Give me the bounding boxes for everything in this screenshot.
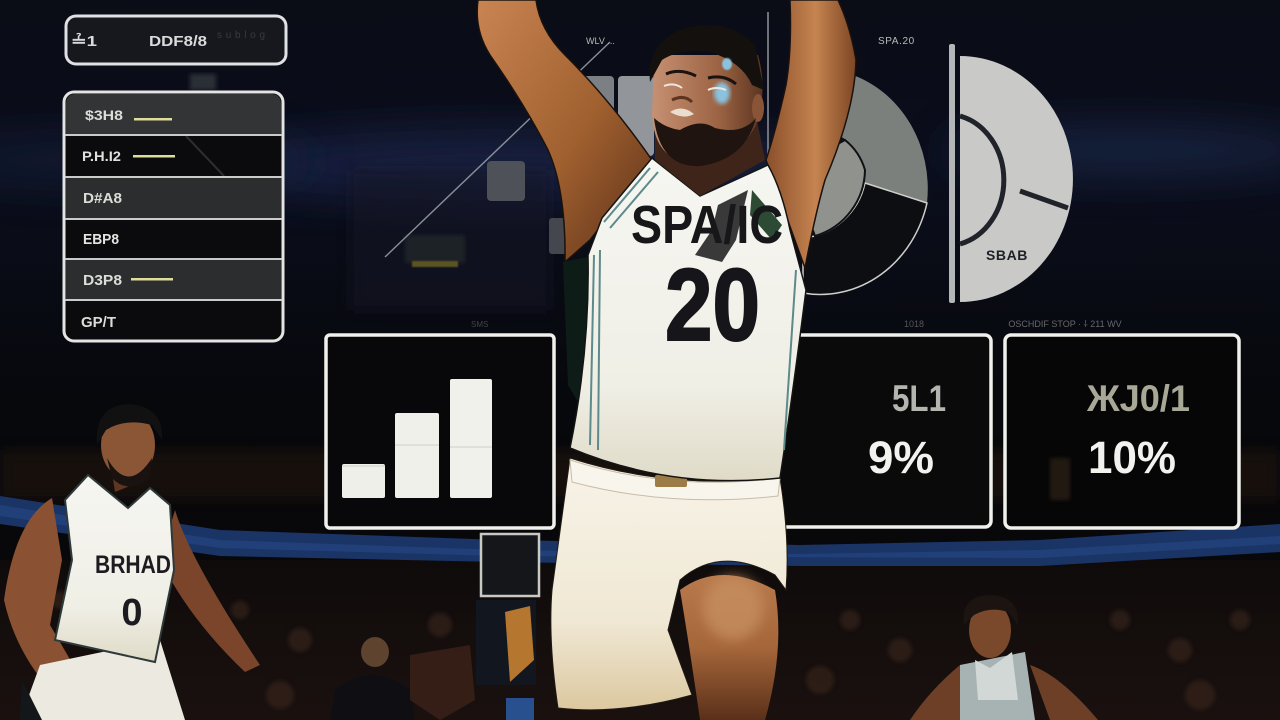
left arm <box>477 0 652 262</box>
bar 1 <box>342 464 385 498</box>
jersey <box>570 158 806 481</box>
header title: DDF8/8 <box>149 33 207 50</box>
right arm <box>766 0 856 268</box>
half donut label: SBAB <box>986 247 1028 263</box>
row 6: GP/T <box>81 314 116 331</box>
left player number: 0 <box>121 592 143 634</box>
jersey wordmark: SPA/IC <box>631 195 783 255</box>
panel: header bar <box>66 16 286 64</box>
panel: bar chart <box>326 335 554 528</box>
lower legs <box>680 575 778 720</box>
hair <box>650 25 764 90</box>
bar 3 <box>450 379 492 498</box>
face highlights <box>714 82 730 104</box>
right player <box>910 595 1098 720</box>
neck <box>655 110 765 196</box>
row 1: $3H8 <box>85 107 123 123</box>
row 5: D3P8 <box>83 272 122 289</box>
faded glyph <box>1050 458 1070 500</box>
panel: stats table <box>64 92 283 341</box>
bar 2 <box>395 413 439 498</box>
main player <box>477 0 856 720</box>
background figure: courtside person <box>330 637 475 720</box>
shorts <box>551 458 787 710</box>
ear <box>752 94 764 122</box>
chart: donut dark <box>586 12 928 294</box>
small caption above bar panel: SMS <box>471 320 488 329</box>
basketball hoop and backboard <box>476 480 539 720</box>
panel: 10 percent stat <box>1005 335 1239 528</box>
wrist strip <box>563 256 592 415</box>
beard <box>654 118 756 166</box>
rounded grey tiles behind player <box>578 76 654 156</box>
jersey number: 20 <box>665 248 760 362</box>
chart: light half donut <box>949 44 1073 303</box>
row 3: D#A8 <box>83 190 122 207</box>
captions above stat panels: OSCHDIF STOP · ⸸ 211 WV <box>1008 319 1122 329</box>
row 2: P.H.I2 <box>82 148 121 164</box>
row 5 <box>83 272 173 289</box>
head <box>652 55 763 162</box>
header left label: ≟1 <box>71 32 97 50</box>
captions above stat panels <box>904 319 1122 329</box>
stat value: 9% <box>868 432 934 483</box>
stat label: ЖJ0/1 <box>1086 378 1190 419</box>
row 1 <box>85 107 172 123</box>
stat value: 10% <box>1088 432 1176 483</box>
row 2 <box>82 148 175 164</box>
row 4: EBP8 <box>83 231 119 248</box>
chart: donut dark: SPA.20 <box>878 36 915 47</box>
stat label: 5L1 <box>892 378 946 419</box>
panel: 9 percent stat <box>770 335 991 527</box>
left player <box>4 404 260 720</box>
left player wordmark: BRHAD <box>95 551 171 579</box>
spur logo <box>695 190 748 262</box>
captions above stat panels: 1018 <box>904 319 924 329</box>
chart: donut dark: WLV ... <box>586 36 615 46</box>
header faded label: sublog <box>217 30 265 41</box>
